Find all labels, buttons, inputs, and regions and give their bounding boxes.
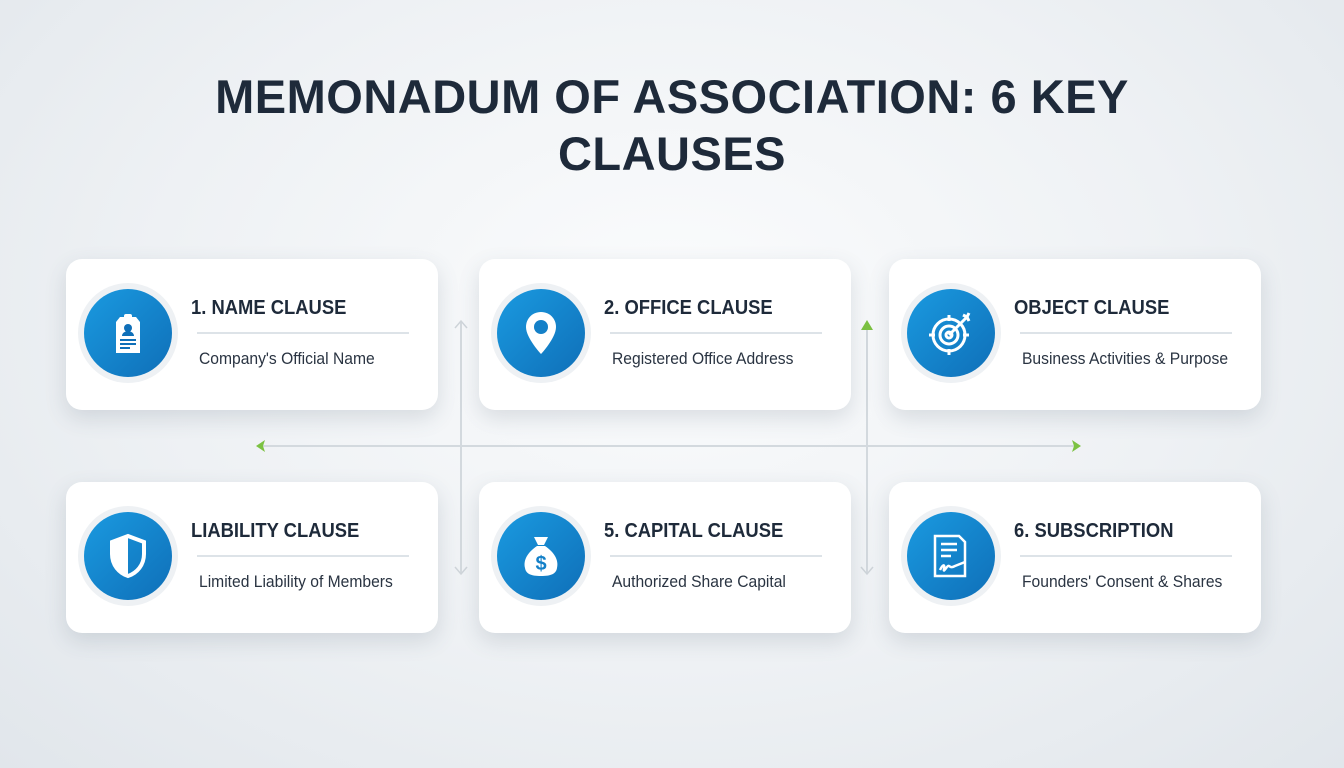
icon: money bag: $ — [535, 553, 547, 575]
card: office clause — [479, 259, 851, 410]
card: capital clause: Authorized Share Capital — [612, 572, 786, 591]
icon: location pin — [491, 283, 591, 383]
card: capital clause: 5. CAPITAL CLAUSE — [604, 520, 783, 542]
icon: id tag — [78, 283, 178, 383]
card: name clause: 1. NAME CLAUSE — [191, 297, 346, 319]
card: subscription: Founders' Consent & Shares — [1022, 572, 1222, 591]
card: object clause: OBJECT CLAUSE — [1014, 297, 1169, 319]
card: capital clause — [479, 482, 851, 633]
icon: shield — [78, 506, 178, 606]
title: MEMONADUM OF ASSOCIATION: 6 KEY — [215, 70, 1129, 123]
card: office clause: Registered Office Address — [612, 349, 793, 368]
title — [215, 70, 1129, 180]
card: office clause: 2. OFFICE CLAUSE — [604, 297, 773, 319]
card: object clause: Business Activities & Purpose — [1022, 349, 1228, 368]
card: liability clause: Limited Liability of Members — [199, 572, 393, 591]
icon: target — [901, 283, 1001, 383]
card: object clause — [889, 259, 1261, 410]
card: liability clause: LIABILITY CLAUSE — [191, 520, 359, 542]
card: name clause: Company's Official Name — [199, 349, 375, 368]
card: liability clause — [66, 482, 438, 633]
card: subscription: 6. SUBSCRIPTION — [1014, 520, 1173, 542]
card: subscription — [889, 482, 1261, 633]
icon: signed document — [901, 506, 1001, 606]
title: CLAUSES — [558, 127, 786, 180]
icon: money bag — [491, 506, 591, 606]
card: name clause — [66, 259, 438, 410]
